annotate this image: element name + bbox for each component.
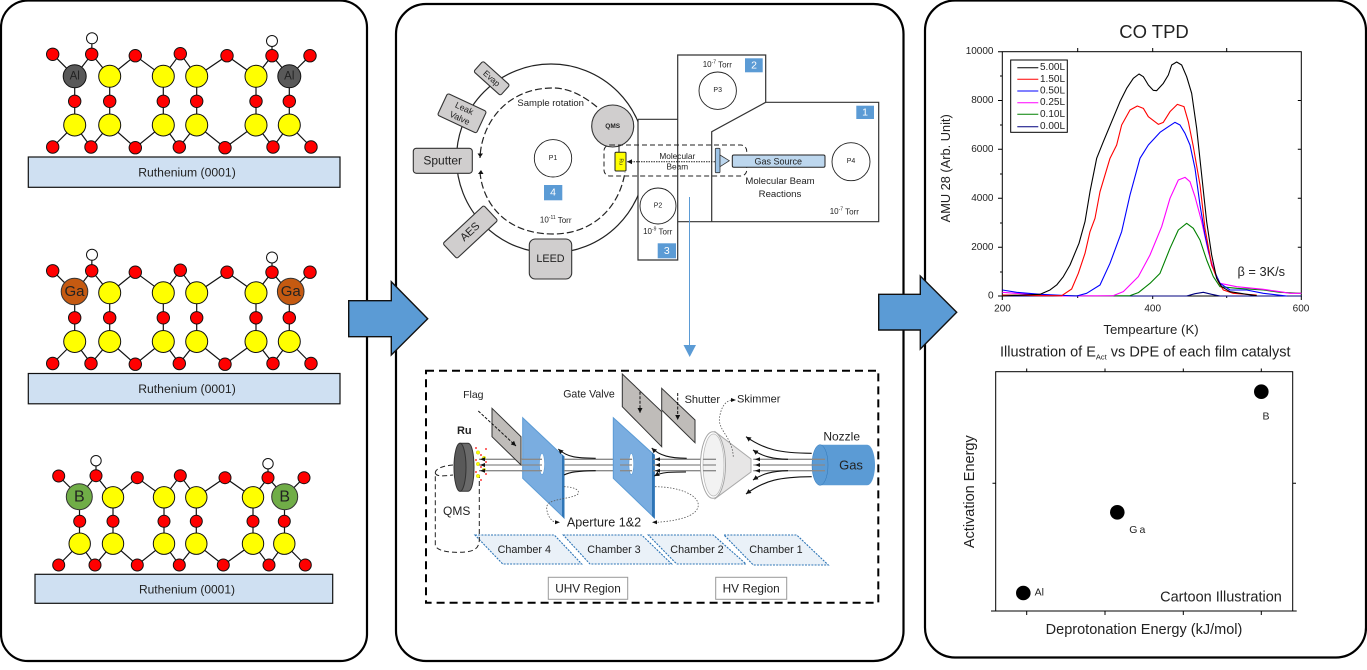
label: molecular beam: [659, 151, 696, 172]
Ru surface atoms: [475, 447, 487, 481]
skimmer leader: [719, 400, 733, 457]
chamber number 2: 2: [751, 59, 757, 71]
beam line: [627, 161, 715, 163]
port: AES: AES: [458, 220, 482, 244]
chamber number 1: 1: [862, 106, 868, 118]
y axis title: AMU 28 (Arb. Unit): [938, 114, 953, 222]
chart title: CO TPD: [1119, 21, 1189, 42]
pressure labels: 10: [540, 216, 549, 224]
port: Leak Valve: [437, 93, 487, 133]
x axis title: Tempearture (K): [1103, 322, 1199, 337]
nozzle cylinder: [812, 445, 875, 485]
atom: left Al: Al: [70, 70, 80, 82]
UHV region label: [548, 577, 628, 599]
point: Al: [1016, 586, 1044, 600]
gate valve arrow: [639, 392, 641, 413]
atom: right Ga: [277, 278, 304, 305]
chart title: Act: [1096, 352, 1108, 361]
TPD curves: [1002, 62, 1301, 296]
chart: activation energy vs deprotonation energy: [962, 344, 1297, 638]
label: aperture: Aperture 1&2: [567, 515, 641, 529]
pump: P3: [699, 72, 736, 109]
beam arrowheads at Ru: [480, 457, 485, 473]
pump: P1: [534, 140, 572, 177]
legend: 0.10L: [1040, 109, 1065, 120]
atom: right Al: Al: [284, 70, 294, 82]
pressure labels: 10: [830, 207, 839, 216]
y tick labels: 2000: [971, 242, 994, 253]
x tick labels: 200: [994, 304, 1011, 314]
pressure labels: Torr: [716, 60, 732, 69]
chamber 1 floor: [724, 535, 828, 565]
Ru sample: [615, 152, 626, 171]
diagram: UHV chamber top view: [413, 55, 879, 279]
substrate label: Ruthenium (0001): [138, 166, 236, 180]
chamber 2 floor: Chamber 2: [670, 544, 724, 556]
atom: right Al: [278, 65, 301, 88]
y tick labels: 4000: [971, 193, 994, 204]
label: molecular beam: Beam: [666, 162, 688, 172]
skimmer cone: [700, 432, 751, 499]
shutter: [662, 388, 695, 443]
QMS connector: [618, 146, 620, 152]
TPD axes: [998, 48, 1301, 300]
gas source: [732, 155, 825, 167]
label: molecular beam reactions: Reactions: [759, 189, 802, 200]
gate valve: [622, 374, 662, 447]
y tick labels: 6000: [971, 144, 994, 155]
pressure labels: -7: [712, 59, 716, 65]
label: shutter: Shutter: [685, 394, 720, 406]
atom: left B: [66, 484, 92, 510]
aperture 2 scatter curves: [652, 448, 687, 458]
gas source: Gas Source: [755, 156, 802, 166]
x axis title: Deprotonation Energy (kJ/mol): [1046, 622, 1242, 638]
y tick labels: 8000: [971, 95, 994, 106]
heating rate annotation: β = 3K/s: [1238, 264, 1285, 279]
chamber number 4: 4: [550, 187, 556, 199]
chamber number 1: [856, 106, 874, 119]
structure: Al film on ruthenium: [28, 33, 340, 187]
UHV region label: UHV Region: [555, 582, 621, 596]
panel: results charts: [925, 0, 1366, 658]
port: QMS: [592, 105, 634, 147]
beam lines QMS side: [479, 459, 542, 471]
port: LEED: [529, 239, 572, 279]
chart title: Illustration of E: [1000, 344, 1096, 360]
label: molecular beam: Molecular: [659, 151, 696, 161]
port: Sputter: Sputter: [423, 154, 462, 168]
pressure labels: Torr: [556, 216, 572, 224]
pressure labels: Torr: [656, 227, 673, 236]
Ru disk: [454, 443, 474, 491]
chamber 4 floor: Chamber 4: [498, 544, 551, 556]
chamber number 3: 3: [664, 245, 670, 257]
pump: P2: [640, 188, 676, 224]
atom: left B: B: [74, 488, 85, 506]
pressure labels: 10: [703, 60, 712, 69]
beam lines between apertures: [521, 459, 632, 471]
label: flag: Flag: [463, 389, 484, 401]
aperture leaders: [547, 487, 698, 524]
point: Ga: Ga: [1129, 524, 1145, 536]
point: Al: Al: [1035, 587, 1044, 599]
QMS dashed cylinder: [435, 465, 479, 552]
chamber 4 floor: [475, 535, 582, 564]
arrow tips for rotation: [478, 154, 484, 174]
chamber 3 floor: Chamber 3: [587, 544, 641, 556]
chamber number 3: [658, 243, 676, 258]
pump: P2: P2: [654, 202, 662, 210]
port: Evap: Evap: [481, 68, 502, 89]
aperture 2: [613, 418, 654, 518]
nozzle plume curves: [746, 437, 812, 494]
note: cartoon illustration: Cartoon Illustration: [1160, 589, 1282, 605]
port: Leak Valve: Leak: [454, 100, 476, 117]
x tick labels: [994, 304, 1310, 314]
sample rotation path: [480, 88, 625, 234]
point: B: B: [1262, 411, 1270, 423]
structure: B film on ruthenium: [35, 456, 333, 603]
Ru sample: Ru: [618, 158, 624, 165]
legend: 0.25L: [1040, 97, 1065, 108]
point: Ga: [1110, 505, 1145, 536]
label: gate valve: Gate Valve: [563, 388, 615, 400]
chamber 3 floor: [563, 535, 672, 564]
flag arrow: [478, 411, 516, 446]
flag: [492, 408, 521, 465]
port: Sputter: [413, 148, 472, 173]
chamber number 2: [745, 58, 763, 72]
y tick labels: [966, 46, 994, 302]
substrate label: Ruthenium (0001): [139, 582, 235, 596]
chart: CO TPD: [938, 21, 1310, 337]
aperture 1 scatter curves: [558, 449, 596, 458]
port: QMS: QMS: [605, 123, 621, 130]
y tick labels: 0: [988, 290, 994, 302]
chamber 1 floor: Chamber 1: [749, 544, 803, 556]
x tick labels: 400: [1144, 304, 1161, 314]
structure: Ga film on ruthenium: [28, 249, 340, 404]
point: B: [1254, 384, 1270, 423]
chamber outlines: [638, 55, 879, 260]
scatter axes: [991, 368, 1297, 615]
port: Leak Valve: Valve: [448, 109, 472, 127]
pressure labels: [540, 59, 859, 236]
label: Ru: Ru: [457, 425, 472, 437]
port: LEED: LEED: [536, 253, 565, 265]
diagram: beam line schematic: [426, 371, 878, 603]
legend: [1011, 60, 1067, 132]
atom: right B: B: [279, 488, 290, 506]
arrow: films to apparatus: [349, 282, 428, 355]
atom: left Ga: Ga: [64, 283, 85, 300]
pressure labels: -9: [652, 227, 657, 233]
chamber 2 floor: [648, 535, 746, 564]
atom: right Ga: Ga: [281, 283, 301, 300]
pump: P4: [832, 143, 870, 181]
shutter arrow: [677, 393, 679, 420]
aperture 1: [523, 418, 564, 518]
nozzle aperture and cone: [715, 148, 729, 173]
pressure labels: -11: [549, 215, 556, 221]
QMS dashed cylinder: QMS: [443, 504, 470, 518]
nozzle cylinder: Gas: [839, 458, 863, 472]
label: molecular beam reactions: Molecular Beam: [745, 176, 815, 187]
pump: P4: P4: [847, 158, 855, 165]
beam lines from nozzle: [753, 459, 825, 471]
atom: left Al: [63, 65, 86, 88]
pressure labels: Torr: [843, 207, 859, 216]
legend: 0.50L: [1040, 86, 1065, 96]
x tick labels: 600: [1293, 304, 1310, 314]
beam lines inside skimmer: [703, 459, 716, 471]
label: molecular beam reactions: [745, 176, 815, 200]
HV region label: HV Region: [723, 582, 780, 596]
pump: P3: P3: [713, 87, 722, 94]
substrate label: Ruthenium (0001): [138, 382, 236, 396]
label: nozzle: Nozzle: [823, 430, 860, 444]
atom: right B: [272, 484, 298, 510]
y tick labels: 10000: [966, 46, 994, 57]
HV region label: [716, 577, 787, 599]
y axis title: Activation Energy: [962, 435, 978, 548]
beam lines to skimmer: [620, 459, 716, 471]
main sample chamber: [456, 64, 646, 253]
arrow: apparatus to results: [879, 276, 957, 349]
pump: P1: P1: [549, 155, 557, 162]
pressure labels: 10: [643, 227, 652, 236]
port: AES: [443, 205, 498, 259]
arrow: detail zoom: [684, 197, 696, 357]
pressure labels: -7: [839, 207, 843, 213]
legend: 5.00L: [1040, 62, 1065, 73]
port: Evap: [474, 61, 510, 96]
panel: catalyst film structures: [1, 0, 367, 661]
legend: 1.50L: [1040, 74, 1065, 85]
label: skimmer: Skimmer: [737, 393, 781, 405]
atom: left Ga: [61, 278, 88, 305]
molecular beam reaction zone: [604, 145, 747, 176]
chart title: vs DPE of each film catalyst: [1107, 344, 1290, 360]
chamber number 4: [544, 185, 562, 200]
panel: molecular beam apparatus: [396, 4, 904, 661]
label: sample rotation: Sample rotation: [517, 98, 584, 109]
legend: 0.00L: [1040, 121, 1065, 132]
